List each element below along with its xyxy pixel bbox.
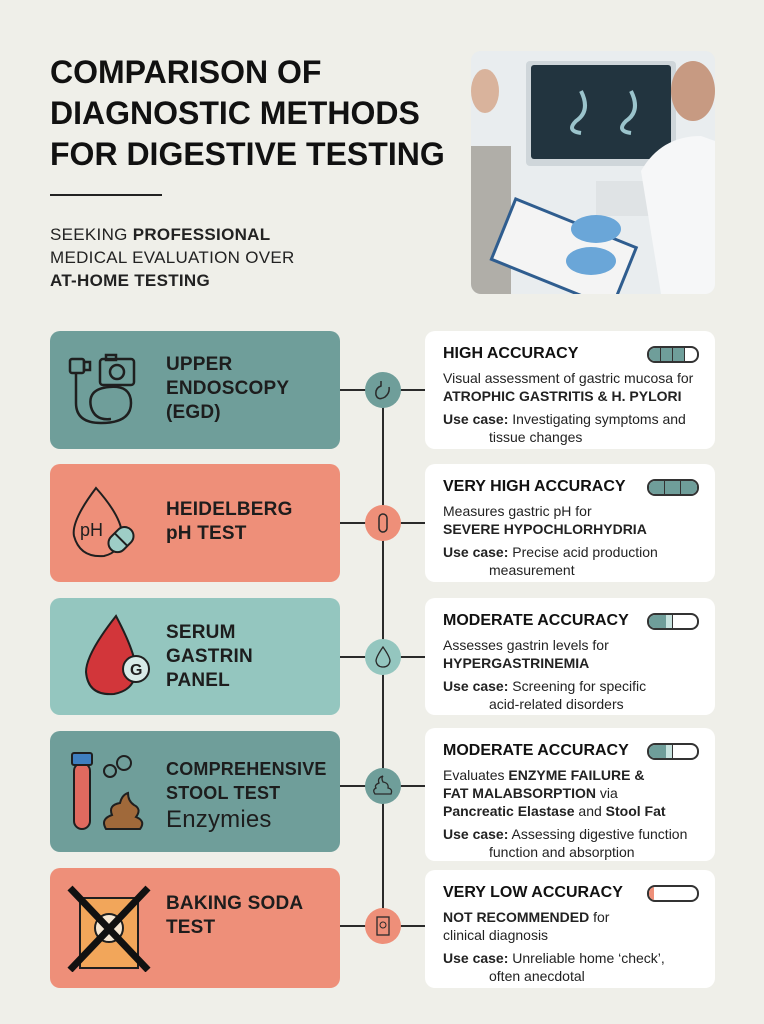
- card: high accuracy: tissue changes: [489, 429, 582, 445]
- card: moderate accuracy 2: MODERATE ACCURACY: [443, 742, 629, 759]
- card: moderate accuracy 1: HYPERGASTRINEMIA: [443, 655, 589, 671]
- card: high accuracy: Use case: Investigating symptoms and: [443, 411, 686, 427]
- node: gastrin drop: [365, 639, 401, 675]
- card: very low accuracy: VERY LOW ACCURACY: [443, 884, 623, 901]
- card: high accuracy: Visual assessment of gastric mucosa for ATROPHIC GASTRITIS & H. PYLORI: [443, 370, 693, 404]
- card: moderate accuracy 1: acid-related disorders: [489, 696, 624, 712]
- panel: serum gastrin: PANEL: [166, 670, 230, 691]
- icon: blood drop: G: [130, 662, 142, 679]
- panel: comprehensive stool test: Enzymies: [166, 806, 272, 833]
- subtitle: AT-HOME TESTING: [50, 271, 210, 290]
- panel: baking soda test: BAKING SODA: [166, 893, 303, 914]
- card: very high accuracy: [425, 464, 715, 582]
- title: COMPARISON OF: [50, 54, 321, 90]
- photo: doctor with patient: [471, 51, 715, 294]
- card: very high accuracy: VERY HIGH ACCURACY: [443, 478, 626, 495]
- card: moderate accuracy 2: function and absorption: [489, 844, 635, 860]
- panel: upper endoscopy: [50, 331, 340, 449]
- subtitle: [50, 225, 295, 290]
- panel: upper endoscopy: ENDOSCOPY: [166, 378, 289, 399]
- card: high accuracy: [425, 331, 715, 449]
- card: very low accuracy: Use case: Unreliable home ‘check’,: [443, 950, 665, 966]
- card: moderate accuracy 2: FAT MALABSORPTION via: [443, 785, 618, 801]
- card: moderate accuracy 2: Use case: Assessing digestive function: [443, 826, 687, 842]
- panel: serum gastrin: [50, 598, 340, 715]
- node: stomach: [365, 372, 401, 408]
- panel: comprehensive stool test: STOOL TEST: [166, 783, 280, 803]
- panel: serum gastrin: SERUM: [166, 622, 236, 643]
- card: very high accuracy: SEVERE HYPOCHLORHYDRIA: [443, 521, 647, 537]
- card: moderate accuracy 1: MODERATE ACCURACY: [443, 612, 629, 629]
- panel: serum gastrin: GASTRIN: [166, 646, 253, 667]
- title: FOR DIGESTIVE TESTING: [50, 136, 445, 172]
- card: high accuracy: HIGH ACCURACY: [443, 345, 578, 362]
- icon: test tube and stool: [71, 752, 144, 830]
- card: very low accuracy: [425, 870, 715, 988]
- icon: blood drop: [85, 614, 150, 696]
- node: box: [365, 908, 401, 944]
- subtitle: SEEKING PROFESSIONAL: [50, 225, 270, 244]
- card: moderate accuracy 1: Assesses gastrin levels for: [443, 637, 609, 653]
- panel: heidelberg pH: [50, 464, 340, 582]
- card: very high accuracy: Use case: Precise acid production: [443, 544, 658, 560]
- card: moderate accuracy 1: Use case: Screening for specific: [443, 678, 646, 694]
- subtitle: MEDICAL EVALUATION OVER: [50, 248, 295, 267]
- card: very high accuracy: measurement: [489, 562, 575, 578]
- panel: comprehensive stool test: COMPREHENSIVE: [166, 759, 327, 779]
- node: capsule: [365, 505, 401, 541]
- panel: baking soda test: [50, 868, 340, 988]
- title: [50, 54, 445, 172]
- card: moderate accuracy 1: [425, 598, 715, 715]
- card: very low accuracy: often anecdotal: [489, 968, 585, 984]
- panel: upper endoscopy: UPPER: [166, 354, 232, 375]
- panel: upper endoscopy: (EGD): [166, 402, 221, 423]
- panel: comprehensive stool test: [50, 731, 340, 852]
- panel: heidelberg pH: HEIDELBERG: [166, 499, 293, 520]
- panel: heidelberg pH: pH TEST: [166, 523, 247, 544]
- icon: endoscope and camera: [68, 354, 136, 424]
- card: very low accuracy: NOT RECOMMENDED for: [443, 909, 609, 925]
- title: DIAGNOSTIC METHODS: [50, 95, 420, 131]
- node: stool: [365, 768, 401, 804]
- icon: pH drop and capsule: pH: [80, 520, 103, 540]
- icon: pH drop and capsule: [72, 486, 134, 558]
- card: moderate accuracy 2: Pancreatic Elastase and Stool Fat: [443, 803, 666, 819]
- card: moderate accuracy 2: [425, 728, 715, 861]
- panel: baking soda test: TEST: [166, 917, 215, 938]
- card: very high accuracy: Measures gastric pH for: [443, 503, 592, 519]
- card: moderate accuracy 2: Evaluates ENZYME FAILURE &: [443, 767, 644, 783]
- card: very low accuracy: clinical diagnosis: [443, 927, 548, 943]
- icon: crossed-out baking soda box: [68, 886, 150, 972]
- connector vertical line: [382, 390, 384, 926]
